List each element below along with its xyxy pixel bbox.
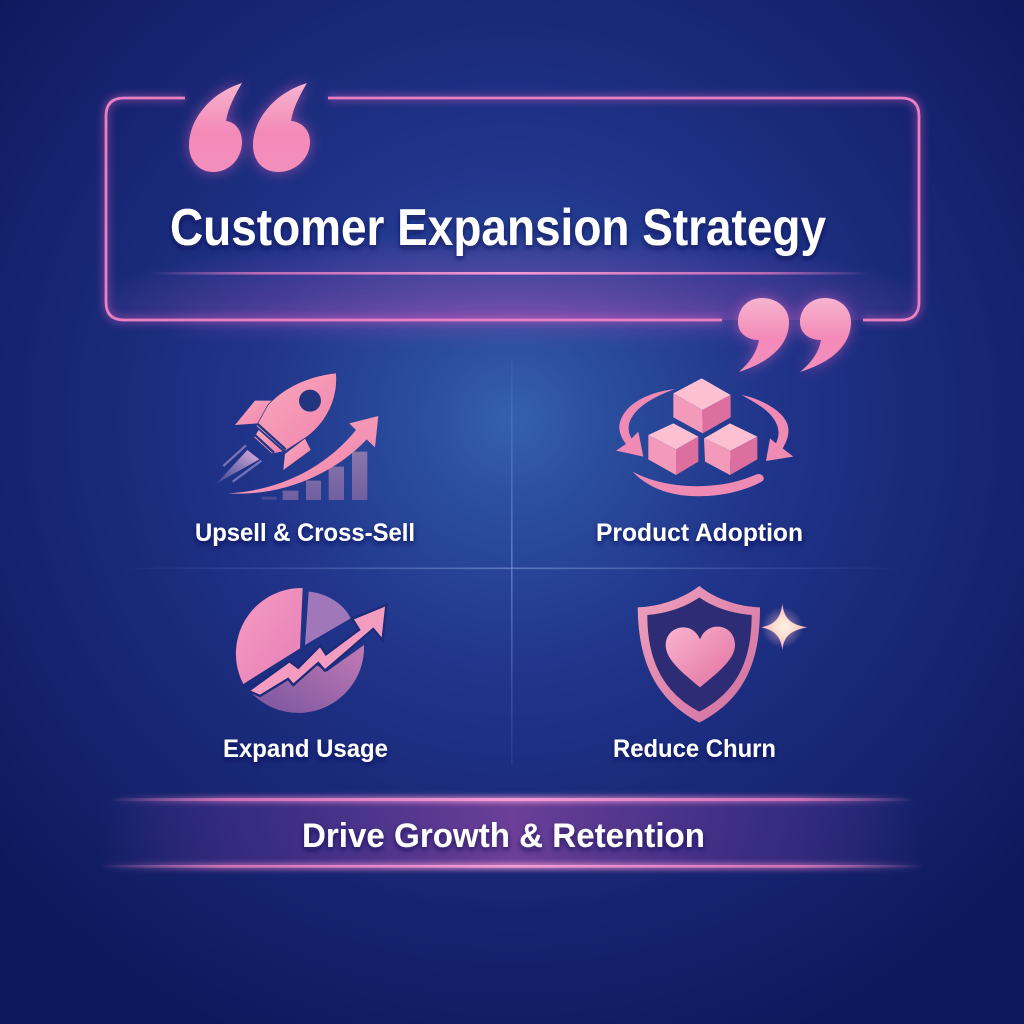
panel: expand usage bbox=[223, 588, 388, 763]
label: reduce churn: Reduce Churn bbox=[613, 735, 776, 763]
panel: footer banner bbox=[100, 797, 924, 869]
panel: product adoption bbox=[596, 378, 803, 547]
label: product adoption: Product Adoption bbox=[596, 519, 803, 547]
panel: upsell and cross-sell bbox=[195, 373, 415, 547]
icon: cubes with circular arrows bbox=[616, 378, 793, 496]
icon: shield with heart and sparkle bbox=[638, 586, 807, 723]
icon: pie chart with rising arrow bbox=[236, 588, 385, 713]
title: Customer Expansion Strategy bbox=[170, 199, 826, 257]
panel: title frame bbox=[106, 83, 919, 372]
footer text: Drive Growth & Retention bbox=[302, 817, 705, 855]
label: upsell and cross-sell: Upsell & Cross-Sell bbox=[195, 519, 415, 547]
closing quotation mark icon bbox=[738, 298, 851, 372]
opening quotation mark icon bbox=[189, 83, 310, 172]
panel: reduce churn bbox=[613, 586, 807, 763]
icon: rocket with growth arrow bbox=[217, 373, 378, 500]
label: expand usage: Expand Usage bbox=[223, 735, 388, 763]
